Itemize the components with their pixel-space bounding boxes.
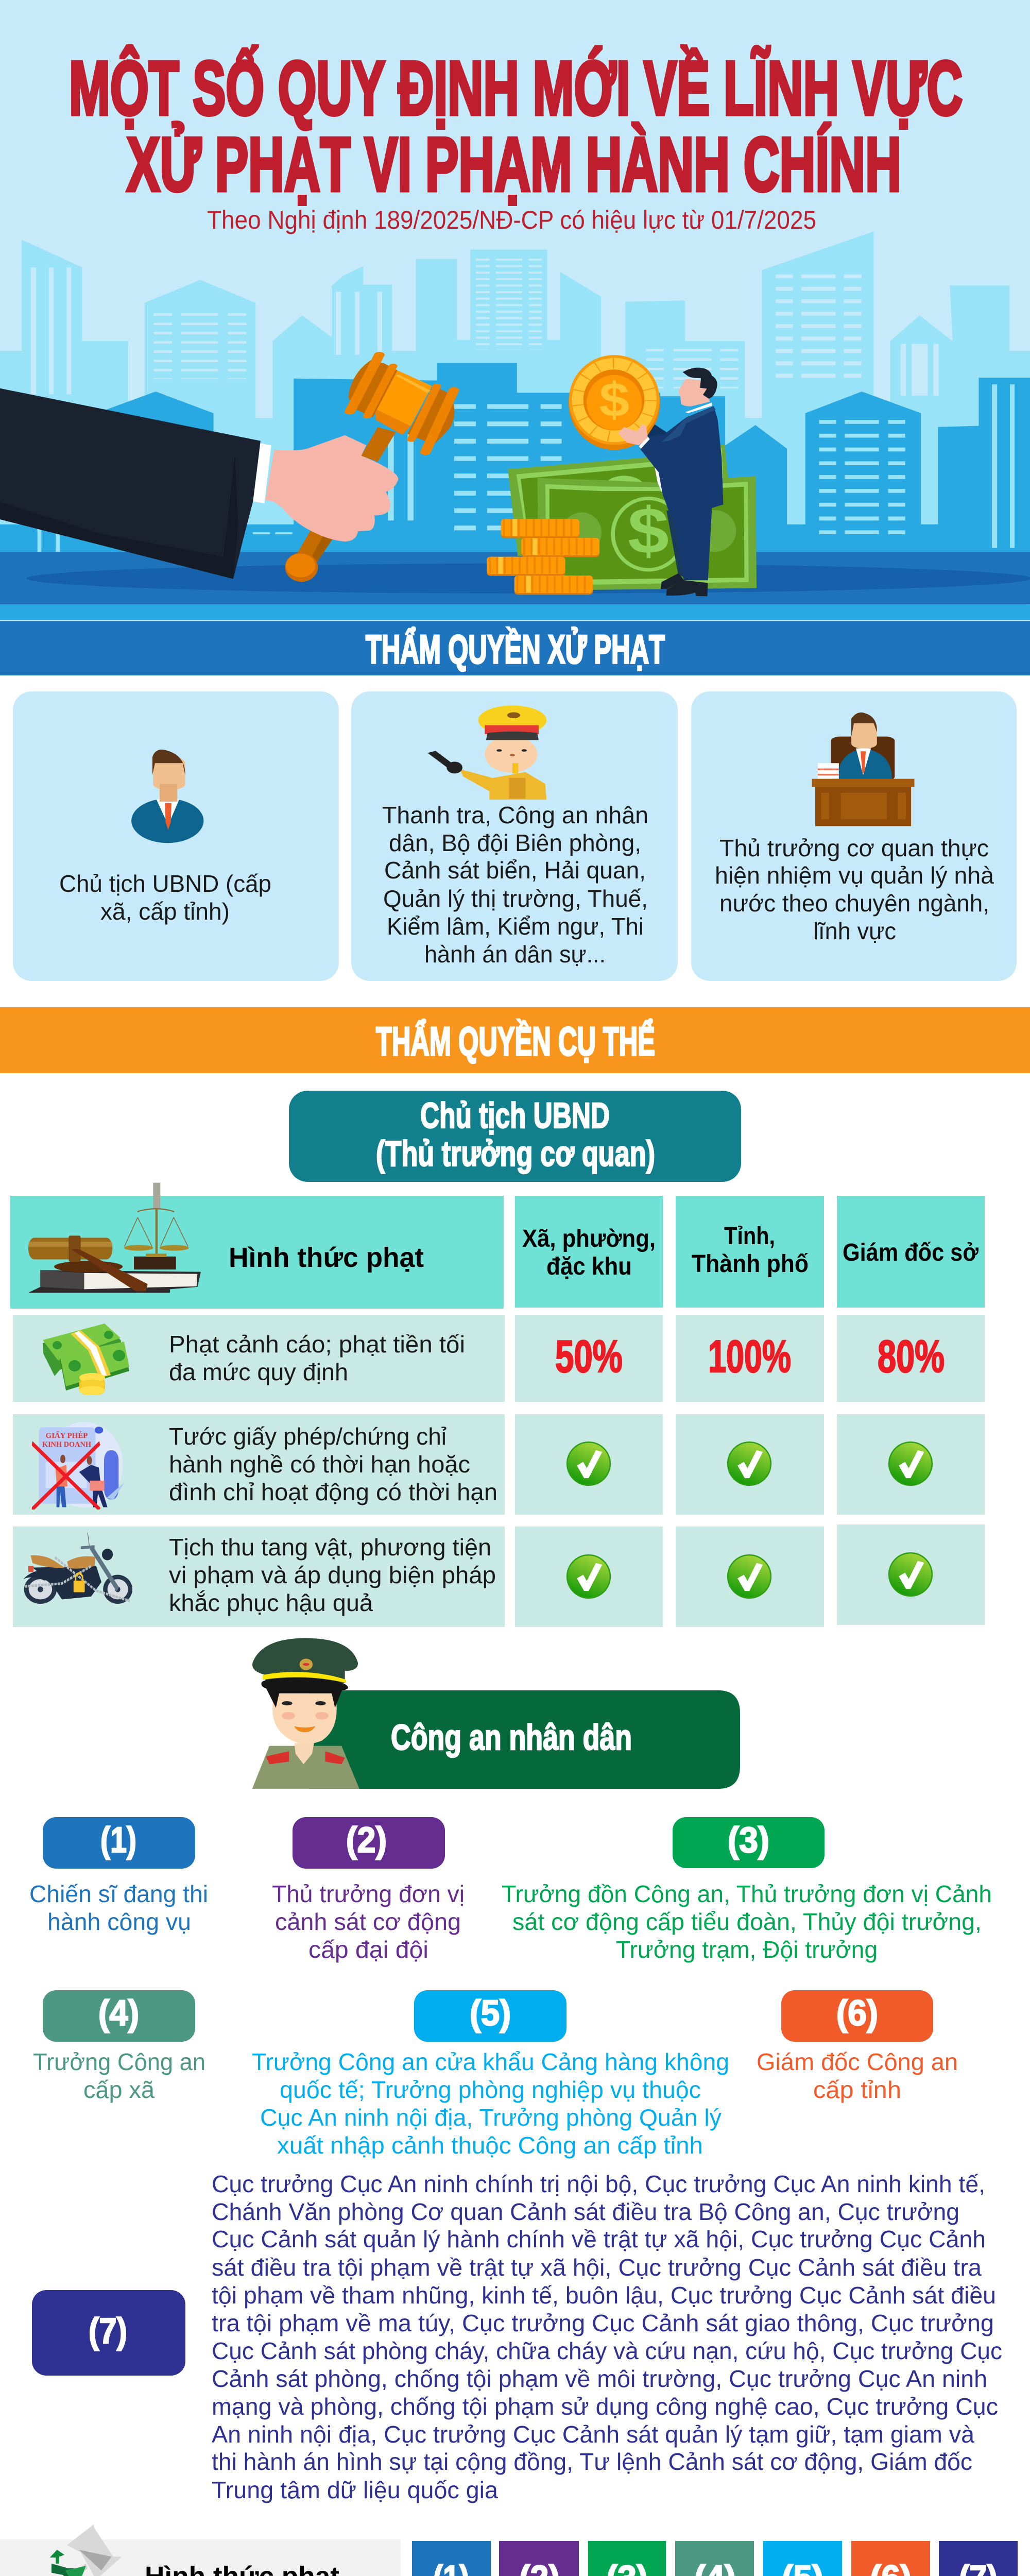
group 5: trưởng công an cửa khẩu: Cục An ninh nội địa, Trưởng phòng Quản lý <box>260 2104 722 2131</box>
row: tịch thu <box>13 1524 985 1627</box>
row: tịch thu: khắc phục hậu quả <box>169 1589 373 1616</box>
row: tịch thu: vi phạm và áp dụng biện pháp <box>169 1562 496 1588</box>
group 3: trưởng đồn: Trưởng đồn Công an, Thủ trưởng đơn vị Cảnh <box>502 1880 992 1907</box>
hero banner <box>0 0 1030 623</box>
group 4: trưởng công an cấp xã: Trưởng Công an <box>33 2048 205 2075</box>
coin stacks <box>487 519 599 595</box>
table header: Giám đốc sở <box>843 1239 979 1266</box>
heading: công an nhân dân: Công an nhân dân <box>391 1717 632 1757</box>
group 3: trưởng đồn: Trưởng trạm, Đội trưởng <box>616 1936 878 1963</box>
table header <box>10 1196 985 1309</box>
group 7: cục trưởng: An ninh nội địa, Cục trưởng Cục Cảnh sát quản lý tạm giữ, tạm giam và <box>212 2421 974 2448</box>
row: phạt cảnh cáo: 80% <box>878 1331 945 1382</box>
group 7: cục trưởng <box>32 2171 1002 2503</box>
group 2: thủ trưởng đơn vị <box>272 1817 465 1963</box>
section heading: thẩm quyền xử phạt <box>0 621 1030 675</box>
group 5: trưởng công an cửa khẩu: xuất nhập cảnh thuộc Công an cấp tỉnh <box>277 2132 703 2159</box>
section heading: thẩm quyền cụ thể: THẨM QUYỀN CỤ THỂ <box>376 1019 655 1064</box>
text: Thủ trưởng cơ quan thực <box>719 835 989 861</box>
row: phạt cảnh cáo: đa mức quy định <box>169 1359 348 1385</box>
group 5: trưởng công an cửa khẩu: (5) <box>470 1993 511 2033</box>
group 4: trưởng công an cấp xã: (4) <box>98 1993 139 2033</box>
row: tước giấy phép: hành nghề có thời hạn hoặc <box>169 1451 470 1478</box>
row: phạt cảnh cáo: Phạt cảnh cáo; phạt tiền tối <box>169 1331 465 1358</box>
text: Cảnh sát biển, Hải quan, <box>384 857 646 884</box>
group 7: cục trưởng: Cảnh sát phòng, chống tội phạm về môi trường, Cục trưởng Cục An ninh <box>212 2365 987 2392</box>
group 3: trưởng đồn: sát cơ động cấp tiểu đoàn, Thủy đội trưởng, <box>512 1908 982 1935</box>
group 4: trưởng công an cấp xã <box>33 1990 205 2103</box>
panel: chủ tịch UBND <box>13 691 339 981</box>
text <box>59 870 271 925</box>
group 7: cục trưởng: sát điều tra tội phạm về trật tự xã hội, Cục trưởng Cục Cảnh sát điều tra <box>212 2254 982 2281</box>
group 6: giám đốc công an cấp tỉnh: cấp tỉnh <box>813 2076 901 2103</box>
icon: licence crossed out <box>32 1422 125 1510</box>
icon: chained motorbike <box>23 1533 132 1604</box>
title <box>69 45 963 207</box>
text: Thanh tra, Công an nhân <box>382 802 648 828</box>
section heading: thẩm quyền cụ thể <box>0 1007 1030 1073</box>
text: xã, cấp tỉnh) <box>100 898 230 925</box>
banknotes <box>508 445 757 590</box>
group 6: giám đốc công an cấp tỉnh: Giám đốc Công an <box>757 2048 958 2075</box>
group 1: chiến sĩ <box>29 1817 208 1935</box>
row: tước giấy phép <box>13 1414 985 1515</box>
city skyline <box>0 231 1030 620</box>
heading: công an nhân dân <box>252 1638 740 1789</box>
group 5: trưởng công an cửa khẩu: Trưởng Công an cửa khẩu Cảng hàng không <box>252 2048 729 2075</box>
group 5: trưởng công an cửa khẩu: quốc tế; Trưởng phòng nghiệp vụ thuộc <box>280 2076 701 2103</box>
group 4: trưởng công an cấp xã: cấp xã <box>83 2076 154 2103</box>
group 6: giám đốc công an cấp tỉnh <box>757 1990 958 2103</box>
group 7: cục trưởng: tra tội phạm về ma túy, Cục trưởng Cục Cảnh sát giao thông, Cục trưởng <box>212 2310 994 2336</box>
heading: chủ tịch UBND, thủ trưởng cơ quan: Chủ tịch UBND <box>420 1095 610 1136</box>
group 2: thủ trưởng đơn vị: cảnh sát cơ động <box>275 1908 461 1935</box>
icon: grey gavel with green arrow <box>36 2524 126 2576</box>
group 7: cục trưởng: mạng và phòng, chống tội phạm sử dụng công nghệ cao, Cục trưởng Cục <box>212 2393 998 2420</box>
group 7: cục trưởng: Trung tâm dữ liệu quốc gia <box>212 2477 498 2503</box>
table: thẩm quyền chủ tịch UBND <box>10 1183 985 1627</box>
gavel <box>285 354 454 582</box>
ground <box>0 552 1030 620</box>
text: hiện nhiệm vụ quản lý nhà <box>715 862 994 889</box>
icon: police officer <box>252 1638 359 1789</box>
group 7: cục trưởng: Cục Cảnh sát phòng cháy, chữa cháy và cứu nạn, cứu hộ, Cục trưởng Cục <box>212 2337 1002 2364</box>
table header <box>0 2539 1018 2576</box>
row: tước giấy phép: Tước giấy phép/chứng chỉ <box>169 1423 447 1450</box>
group 7: cục trưởng: (7) <box>89 2311 127 2351</box>
group 3: trưởng đồn <box>502 1817 992 1963</box>
row: tịch thu: Tịch thu tang vật, phương tiện <box>169 1534 491 1561</box>
arm and hand <box>0 388 398 579</box>
icon: gavel and scales <box>28 1183 201 1293</box>
group 2: thủ trưởng đơn vị: cấp đại đội <box>308 1936 428 1963</box>
text: hành án dân sự... <box>424 941 606 968</box>
table: thẩm quyền công an nhân dân <box>0 2524 1030 2576</box>
text: lĩnh vực <box>813 918 896 944</box>
group 1: chiến sĩ: Chiến sĩ đang thi <box>29 1880 208 1907</box>
heading: chủ tịch UBND, thủ trưởng cơ quan <box>289 1091 741 1182</box>
row: phạt cảnh cáo: 50% <box>555 1331 623 1382</box>
subtitle: Theo Nghị định 189/2025/NĐ-CP có hiệu lực từ 01/7/2025 <box>207 206 816 234</box>
gold dollar coin <box>569 355 660 450</box>
text: Quản lý thị trường, Thuế, <box>383 885 648 912</box>
row: phạt cảnh cáo <box>13 1315 985 1402</box>
text: dân, Bộ đội Biên phòng, <box>389 829 641 856</box>
icon: official <box>131 750 203 843</box>
table header: Tỉnh, <box>724 1223 775 1250</box>
text <box>382 802 648 968</box>
group 7: cục trưởng: thi hành án hình sự tại cộng đồng, Tư lệnh Cảnh sát cơ động, Giám đốc <box>212 2448 972 2475</box>
near skyline <box>0 363 1030 553</box>
text <box>715 835 994 944</box>
table header: Xã, phường, <box>522 1225 656 1252</box>
group 1: chiến sĩ: (1) <box>100 1820 136 1860</box>
group 2: thủ trưởng đơn vị: Thủ trưởng đơn vị <box>272 1880 465 1907</box>
group 7: cục trưởng: Cục trưởng Cục An ninh chính trị nội bộ, Cục trưởng Cục An ninh kinh tế, <box>212 2171 985 2197</box>
icon: traffic officer <box>432 705 546 800</box>
table header: Hình thức phạt <box>229 1242 424 1273</box>
icon: official at desk <box>812 713 914 826</box>
group 7: cục trưởng: Chánh Văn phòng Cơ quan Cảnh sát điều tra Bộ Công an, Cục trưởng <box>212 2198 959 2225</box>
table header: Thành phố <box>692 1250 809 1278</box>
group 5: trưởng công an cửa khẩu <box>252 1990 729 2159</box>
panel: thủ trưởng cơ quan <box>691 691 1017 981</box>
text: nước theo chuyên ngành, <box>719 890 989 917</box>
far skyline <box>0 231 1030 552</box>
group 6: giám đốc công an cấp tỉnh: (6) <box>836 1993 878 2033</box>
businessman <box>618 368 723 596</box>
group 3: trưởng đồn: (3) <box>728 1820 769 1860</box>
banknotes: $ <box>628 494 669 567</box>
icon: money <box>43 1324 129 1395</box>
section heading: thẩm quyền xử phạt: THẨM QUYỀN XỬ PHẠT <box>366 626 665 672</box>
panel: thanh tra <box>351 691 678 981</box>
text: Chủ tịch UBND (cấp <box>59 870 271 897</box>
row: tước giấy phép: đình chỉ hoạt động có thời hạn <box>169 1479 497 1505</box>
group 1: chiến sĩ: hành công vụ <box>47 1908 191 1935</box>
heading: chủ tịch UBND, thủ trưởng cơ quan: (Thủ trưởng cơ quan) <box>376 1133 655 1174</box>
row: phạt cảnh cáo: 100% <box>708 1331 791 1382</box>
gold dollar coin: $ <box>599 373 629 427</box>
text: Kiểm lâm, Kiểm ngư, Thi <box>387 913 644 940</box>
group 7: cục trưởng: tội phạm về tham nhũng, kinh tế, buôn lậu, Cục trưởng Cục Cảnh sát điều <box>212 2282 996 2309</box>
group 2: thủ trưởng đơn vị: (2) <box>346 1820 387 1860</box>
group 7: cục trưởng: Cục Cảnh sát quản lý hành chính về trật tự xã hội, Cục trưởng Cục Cảnh <box>212 2226 986 2252</box>
table header: đặc khu <box>546 1253 632 1280</box>
